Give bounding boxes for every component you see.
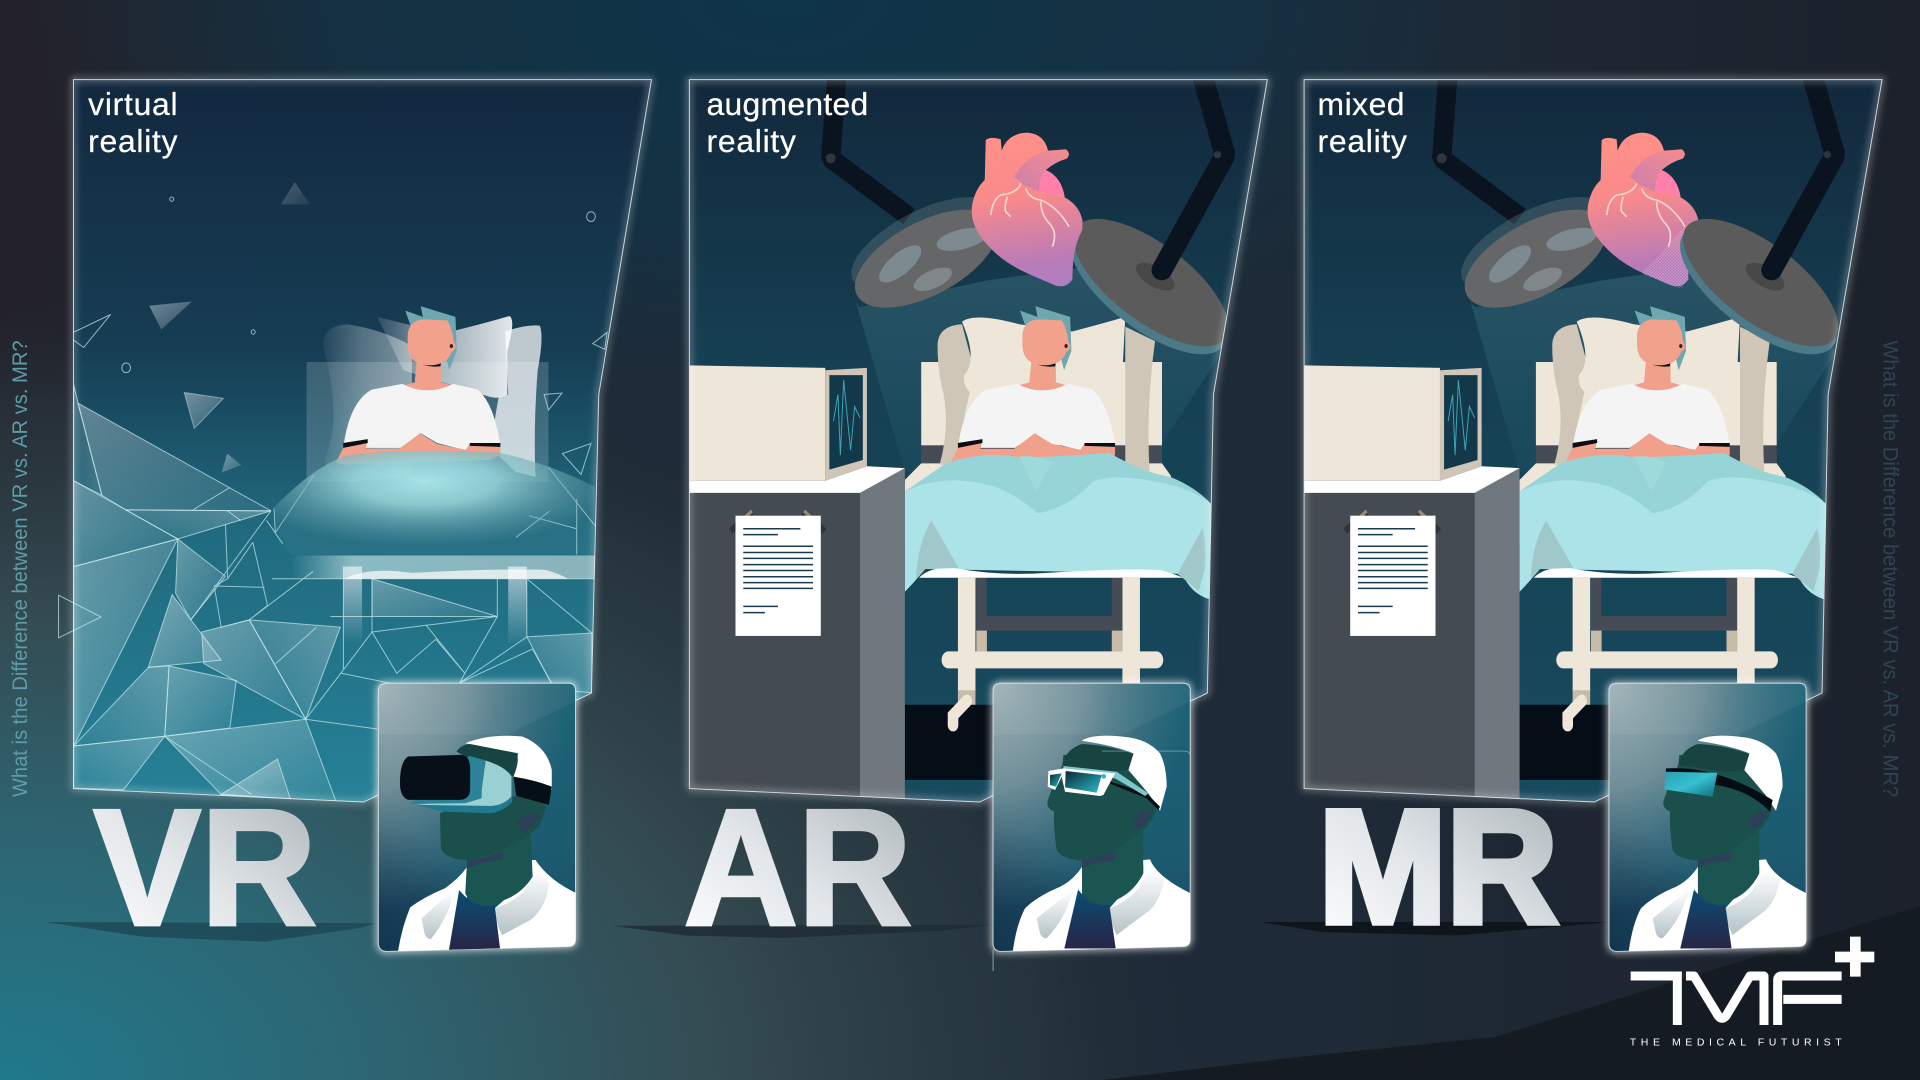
MR visor [1664, 768, 1773, 812]
heading: MR: MR [1319, 777, 1558, 956]
panel: virtual reality [59, 80, 651, 802]
patient [951, 306, 1115, 465]
clipboard paper [1345, 511, 1439, 636]
ghost pillows and headboard [307, 316, 548, 482]
clipboard paper [731, 511, 824, 636]
doctor [1013, 736, 1192, 953]
heading: AR: AR [684, 775, 912, 960]
border [1304, 80, 1882, 802]
panel: mixed reality [1304, 70, 1882, 802]
light beam [1470, 272, 1835, 440]
monitor [1304, 365, 1482, 481]
lamp arm left [826, 70, 909, 217]
card: MR doctor [1609, 683, 1808, 953]
doctor with VR headset [398, 736, 576, 952]
label: mixed reality: reality [1318, 123, 1407, 159]
lamp right [1050, 70, 1248, 378]
lamp left [851, 197, 992, 308]
patient [1565, 306, 1730, 465]
blanket [905, 453, 1211, 599]
shadow under VR [45, 922, 377, 942]
patient [336, 306, 500, 465]
logo: The Medical Futurist [1630, 937, 1874, 1049]
panel: augmented reality [689, 70, 1267, 802]
bed [904, 318, 1171, 780]
lamp arm left [1437, 70, 1520, 217]
shadow under AR [612, 924, 994, 938]
polygon mesh [74, 385, 595, 802]
vertical caption right: What is the Difference between VR vs. AR vs. MR? [1878, 340, 1901, 797]
heading: VR: VR [94, 775, 317, 960]
border [73, 80, 651, 802]
cabinet [689, 466, 905, 798]
label: augmented reality: reality [707, 123, 796, 159]
triangle outside panel [59, 595, 101, 638]
cabinet [1304, 466, 1520, 798]
label: virtual reality: virtual [88, 86, 178, 122]
lamp left [1461, 197, 1604, 308]
card: AR doctor [993, 683, 1192, 953]
shadow under MR [1261, 922, 1611, 936]
heart hologram [972, 133, 1082, 286]
border [689, 80, 1267, 802]
label: virtual reality: reality [88, 123, 178, 159]
bed [1520, 318, 1786, 780]
light beam [856, 268, 1220, 440]
vertical caption left: What is the Difference between VR vs. AR vs. MR? [9, 340, 32, 797]
AR glasses [1048, 751, 1191, 810]
lamp right in front of heart [1660, 70, 1858, 378]
label: augmented reality: augmented [707, 86, 868, 122]
label: mixed reality: mixed [1318, 86, 1404, 122]
ghost blanket and bed [273, 451, 595, 647]
monitor [689, 365, 867, 481]
blanket [1520, 453, 1826, 599]
doctor [1629, 736, 1808, 953]
logo caption: THE MEDICAL FUTURIST [1630, 1037, 1842, 1049]
thin line under AR card [992, 949, 994, 971]
heart mixed [1588, 133, 1698, 288]
card: VR doctor [378, 683, 576, 952]
floating triangles and circles [67, 182, 607, 474]
